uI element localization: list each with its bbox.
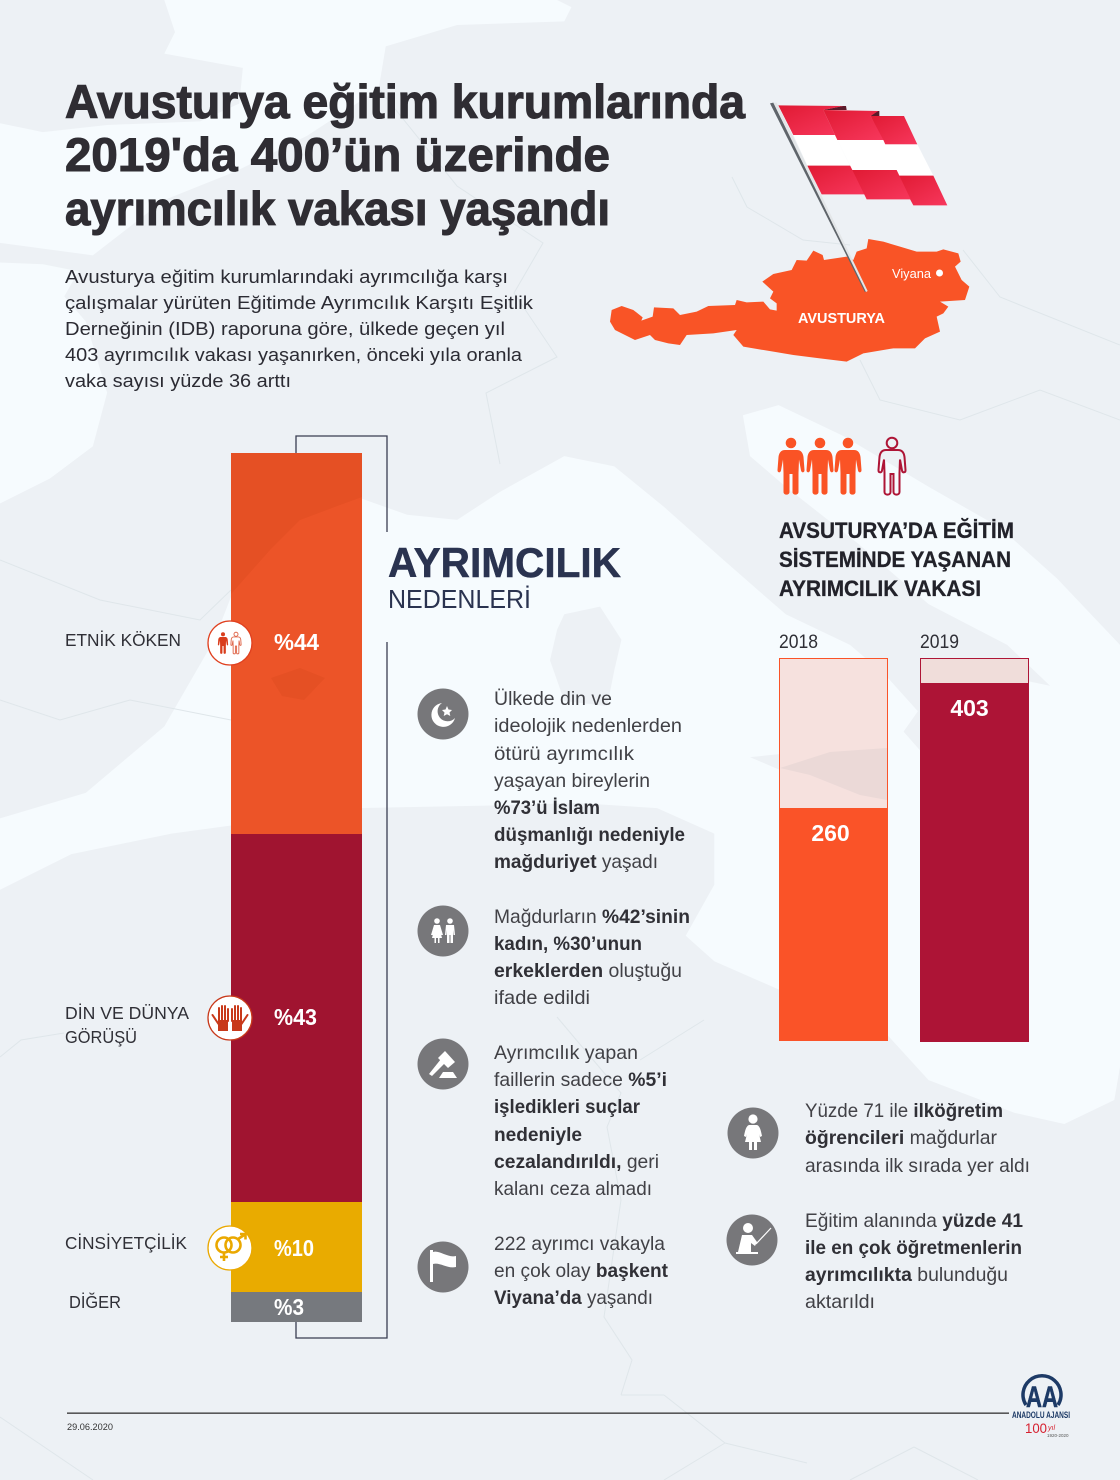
segment: religion [231,834,362,1202]
text: teachers [805,1210,1023,1313]
title: ayrımcılık vakası yaşandı [65,182,610,235]
text: students: Yüzde 71 ile ilköğretim [805,1100,1003,1122]
percent values: %3 [274,1294,304,1320]
logo: Anadolu Ajansi: ANADOLU AJANSI [1012,1410,1070,1421]
year labels: 2018 [779,632,818,653]
bar: 2019: 403 [950,695,989,721]
title [65,75,746,235]
labels: categories: DİN VE DÜNYA [65,1003,189,1023]
text: perpetrators: nedeniyle [494,1124,582,1146]
logo: Anadolu Ajansi: yıl [1047,1425,1055,1432]
intro text: Derneğinin (IDB) raporuna göre, ülkede geçen yıl [65,319,505,339]
labels: categories: ETNİK KÖKEN [65,630,181,650]
text: teachers: Eğitim alanında yüzde 41 [805,1210,1023,1232]
icon: teacher [726,1214,778,1266]
intro text: vaka sayısı yüzde 36 arttı [65,371,291,391]
logo: Anadolu Ajansi: 100 [1025,1420,1047,1436]
stacked bar: causes [231,453,362,1322]
heading: cases: AYRIMCILIK VAKASI [779,576,981,601]
intro text [65,267,534,391]
segment: ethnic origin [231,453,362,834]
year labels: 2019 [920,632,959,653]
text: religion [494,688,685,873]
logo: Anadolu Ajansi [1012,1376,1070,1438]
labels: categories: GÖRÜŞÜ [65,1027,137,1047]
labels: categories [65,630,189,1312]
text: teachers: ile en çok öğretmenlerin [805,1237,1022,1259]
logo: Anadolu Ajansi: 1920-2020 [1047,1433,1069,1438]
text: Vienna: en çok olay başkent [494,1260,668,1282]
year labels [779,632,959,653]
text: teachers: aktarıldı [805,1291,875,1313]
icon: gender [208,1226,252,1270]
heading: cases [779,518,1014,601]
icon: people [777,438,906,495]
text: religion: Ülkede din ve [494,688,612,710]
text: teachers: ayrımcılıkta bulunduğu [805,1264,1008,1286]
icon: hands [208,996,252,1040]
heading: Ayrımcılık nedenleri: AYRIMCILIK [388,539,621,586]
text: perpetrators [494,1042,667,1200]
text: students: arasında ilk sırada yer aldı [805,1155,1030,1177]
bar: 2019 [920,658,1029,1042]
segment: other [231,1292,362,1322]
text: Vienna: Viyana’da yaşandı [494,1287,653,1309]
text: gender: erkeklerden oluştuğu [494,960,682,982]
icon: crescent and star [418,688,468,740]
text: religion: %73’ü İslam [494,796,600,819]
text: students [805,1100,1030,1177]
text: perpetrators: kalanı ceza almadı [494,1178,652,1200]
icon: student [728,1108,778,1158]
intro text: çalışmalar yürüten Eğitimde Ayrımcılık Karşıtı Eşitlik [65,293,534,313]
text: religion: ideolojik nedenlerden [494,715,682,737]
bracket [296,436,387,1338]
text: gender: kadın, %30’unun [494,933,642,955]
labels: categories: CİNSİYETÇİLİK [65,1233,187,1253]
icon: gavel [418,1038,468,1090]
bar: 2018: 260 [811,820,850,846]
text: Vienna [494,1233,668,1309]
percent values: %43 [274,1004,317,1030]
heading: cases: SİSTEMİNDE YAŞANAN [779,547,1011,572]
text: religion: ötürü ayrımcılık [494,743,634,765]
text: perpetrators: faillerin sadece %5’i [494,1069,667,1091]
text: religion: mağduriyet yaşadı [494,851,658,873]
text: perpetrators: cezalandırıldı, geri [494,1151,659,1173]
map of Austria [610,239,969,362]
intro text: Avusturya eğitim kurumlarındaki ayrımcılığa karşı [65,267,508,287]
heading: cases: AVSUTURYA’DA EĞİTİM [779,518,1014,543]
icon: flag [770,103,947,292]
text: gender: ifade edildi [494,987,590,1009]
percent values: %10 [274,1235,314,1261]
text: religion: düşmanlığı nedeniyle [494,824,685,846]
percent values: %44 [274,629,319,655]
heading: Ayrımcılık nedenleri [388,539,621,614]
intro text: 403 ayrımcılık vakası yaşanırken, önceki yıla oranla [65,345,523,365]
text: perpetrators: işledikleri suçlar [494,1096,640,1118]
segment: sexism [231,1202,362,1292]
text: gender: Mağdurların %42’sinin [494,906,690,928]
footer line and date: 29.06.2020 [67,1422,113,1432]
icon: flag circle [418,1242,468,1292]
title: 2019'da 400’ün üzerinde [65,128,610,181]
heading: Ayrımcılık nedenleri: NEDENLERİ [388,584,531,614]
text: perpetrators: Ayrımcılık yapan [494,1042,638,1064]
logo: Anadolu Ajansi: AA [1026,1381,1058,1414]
labels: categories: DİĞER [69,1291,121,1312]
text: Vienna: 222 ayrımcı vakayla [494,1233,665,1255]
icon: ethnic origin [208,621,252,665]
bar: 2018 [779,658,888,1041]
text: gender [494,906,690,1009]
text: religion: yaşayan bireylerin [494,770,650,792]
label: Viyana: Viyana [892,267,931,281]
bar chart: cases [779,632,1029,1042]
icon: woman and man [418,906,468,956]
text: students: öğrencileri mağdurlar [805,1127,997,1149]
title: Avusturya eğitim kurumlarında [65,75,746,128]
label: Avusturya: AVUSTURYA [798,311,886,327]
percent values [274,629,319,1320]
